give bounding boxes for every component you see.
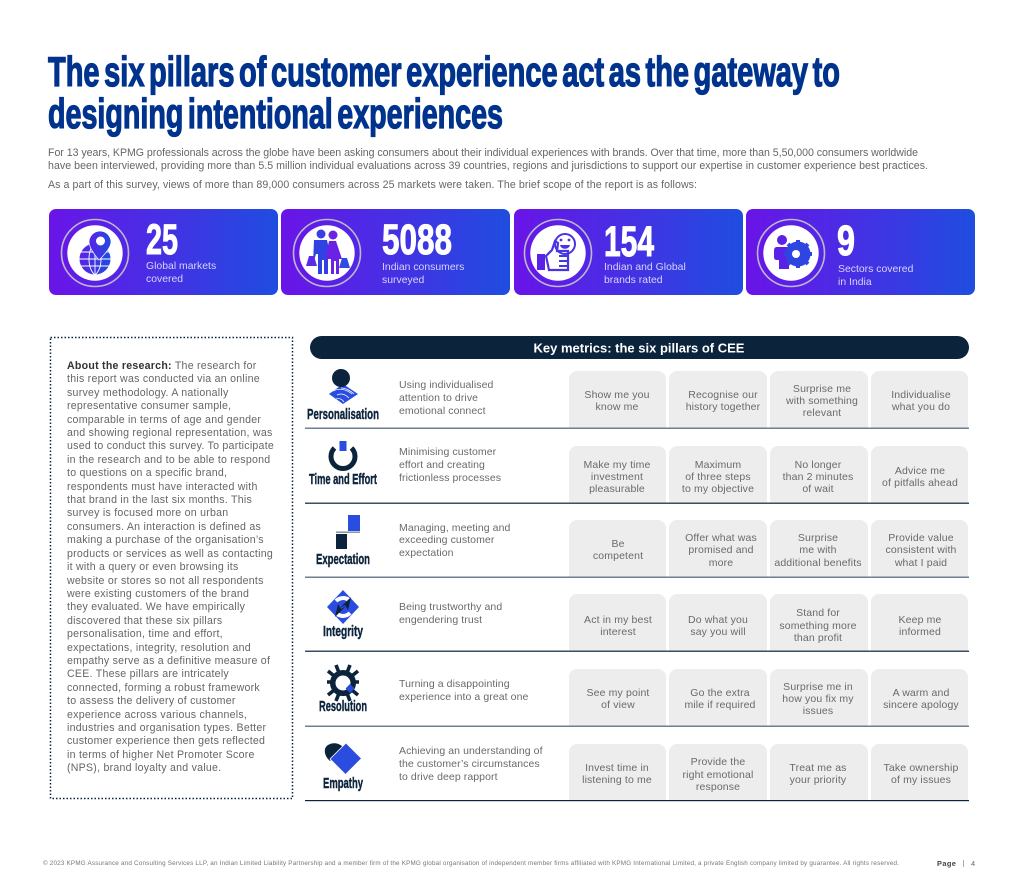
row: expectation: me with — [799, 544, 837, 556]
icon: resolution — [327, 665, 359, 701]
panel: about the research: (NPS), brand loyalty and value. — [67, 762, 221, 774]
row: personalisation: emotional connect — [399, 405, 486, 417]
row: integrity: interest — [600, 626, 636, 638]
row: time and effort: Minimising customer — [399, 446, 497, 458]
panel: about the research: comparable in terms of age and gender — [67, 414, 261, 426]
row: empathy: Achieving an understanding of — [399, 745, 543, 757]
row: personalisation: know me — [596, 401, 639, 413]
panel: about the research: expectations, integrity, resolution and — [67, 642, 251, 654]
row: integrity: Do what you — [688, 614, 748, 626]
title: designing intentional experiences — [48, 90, 503, 137]
panel: about the research: empathy serve as a definitive measure of — [67, 655, 270, 667]
panel: about the research: it with a query or even browsing its — [67, 561, 239, 573]
intro text: For 13 years, KPMG professionals across the globe have been asking consumers about their individual experiences with brands. Over that time, more than 5,50,000 consumers worldwide — [48, 147, 918, 159]
icon: thumbs up with smiley — [537, 234, 575, 270]
row: empathy: Provide the — [691, 756, 745, 768]
row: time and effort: effort and creating — [399, 459, 485, 471]
icon: time and effort — [331, 441, 355, 468]
panel: stat global markets — [49, 209, 278, 295]
panel: stat sectors — [746, 209, 975, 295]
panel: about the research — [50, 338, 292, 798]
row: integrity: Being trustworthy and — [399, 601, 502, 613]
panel: about the research: personalisation, time and effort, — [67, 628, 223, 640]
row: personalisation: Recognise our — [688, 389, 758, 401]
panel: about the research: were existing customers of the brand — [66, 588, 249, 600]
row: expectation: promised and — [688, 544, 754, 556]
panel: about the research: this report was conducted via an online — [67, 373, 260, 385]
row: resolution: sincere apology — [883, 699, 959, 711]
panel: about the research: customer experience then gets reflected — [67, 735, 265, 747]
row: integrity: Integrity — [323, 624, 363, 640]
row: expectation: competent — [593, 550, 643, 562]
row: time and effort — [305, 441, 969, 504]
row: expectation: Managing, meeting and — [399, 522, 511, 534]
panel: stat Indian consumers: Indian consumers — [382, 262, 464, 273]
row: empathy: Invest time in — [585, 762, 649, 774]
panel: stat brands rated: brands rated — [604, 275, 663, 286]
row: expectation: expectation — [399, 547, 454, 559]
row: expectation: Provide value — [888, 532, 954, 544]
panel: about the research: experience across various channels, — [67, 709, 247, 721]
row: expectation: more — [709, 557, 733, 569]
row: empathy: right emotional — [683, 769, 753, 781]
row: empathy: listening to me — [582, 774, 652, 786]
row: personalisation: Individualise — [891, 389, 951, 401]
panel: about the research: CEE. These pillars are intricately — [67, 668, 229, 680]
page number: Page — [937, 859, 956, 868]
row: time and effort: than 2 minutes — [783, 471, 853, 483]
row: empathy: Take ownership — [884, 762, 958, 774]
row: integrity: than profit — [794, 632, 842, 644]
icon: personalisation — [329, 369, 358, 404]
row: personalisation — [305, 369, 969, 429]
row: resolution: mile if required — [684, 699, 756, 711]
row: expectation: Offer what was — [685, 532, 757, 544]
panel: about the research: survey is focused more on urban — [67, 507, 228, 519]
row: time and effort: frictionless processes — [399, 472, 501, 484]
row: time and effort: Advice me — [895, 465, 945, 477]
panel: stat sectors: Sectors covered — [838, 264, 914, 275]
row: resolution: how you fix my — [782, 693, 854, 705]
row: integrity: Keep me — [898, 614, 942, 626]
row: time and effort: investment — [591, 471, 643, 483]
panel: about the research: About the research: The research for — [67, 360, 257, 372]
row: expectation: exceeding customer — [399, 534, 495, 546]
intro text: As a part of this survey, views of more than 89,000 consumers across 25 markets were taken. The brief scope of the report is as follows: — [48, 179, 697, 191]
row: personalisation: Surprise me — [793, 383, 851, 395]
row: empathy: Empathy — [323, 776, 363, 792]
row: time and effort: Maximum — [695, 459, 741, 471]
row: resolution: of view — [601, 699, 635, 711]
panel: stat sectors: 9 — [837, 217, 855, 265]
row: time and effort: No longer — [795, 459, 842, 471]
panel: stat sectors: in India — [838, 277, 872, 288]
row: time and effort: of wait — [802, 483, 834, 495]
row: resolution: Go the extra — [690, 687, 750, 699]
panel: about the research: to assess the delivery of customer — [67, 695, 236, 707]
row: resolution: Turning a disappointing — [399, 678, 510, 690]
title — [48, 48, 840, 137]
panel: stat brands rated: 154 — [604, 218, 654, 266]
panel: stat global markets: covered — [146, 274, 183, 285]
page number — [937, 859, 975, 868]
panel: about the research: website or stores so not all respondents — [66, 575, 264, 587]
row: empathy: the customer’s circumstances — [399, 758, 540, 770]
row: integrity: informed — [899, 626, 941, 638]
panel: about the research: respondents must have interacted with — [67, 481, 258, 493]
row: expectation: what I paid — [894, 557, 947, 569]
panel: about the research: they evaluated. We have empirically — [67, 601, 246, 613]
row: empathy: Treat me as — [789, 762, 847, 774]
panel: about the research: making a purchase of the organisation’s — [67, 534, 264, 546]
row: time and effort: Time and Effort — [309, 472, 377, 488]
intro text — [48, 147, 928, 191]
panel: about the research: industries and organisation types. Better — [67, 722, 267, 734]
panel: about the research: consumers. An interaction is defined as — [67, 521, 261, 533]
panel: about the research: to questions on a specific brand, — [67, 467, 227, 479]
panel: about the research: that brand in the last six months. This — [67, 494, 252, 506]
panel: about the research: discovered that these six pillars — [67, 615, 222, 627]
panel: about the research: survey methodology. A nationally — [67, 387, 229, 399]
row: resolution: Surprise me in — [783, 681, 853, 693]
row: personalisation: attention to drive — [399, 392, 478, 404]
panel: about the research: connected, forming a robust framework — [67, 682, 260, 694]
row: empathy — [305, 743, 969, 801]
panel: stat Indian consumers: surveyed — [382, 275, 425, 286]
row: empathy: your priority — [790, 774, 847, 786]
page number: 4 — [971, 859, 975, 868]
row: expectation — [305, 515, 969, 578]
panel: stat global markets: 25 — [146, 216, 178, 264]
intro text: have been interviewed, providing more than 5.5 million individual evaluations across 39 countries, regions and jurisdictions to support our expertise in customer experience best practices. — [48, 160, 928, 172]
icon: expectation — [336, 515, 360, 549]
row: personalisation: what you do — [891, 401, 950, 413]
panel: stat brands rated: Indian and Global — [604, 262, 686, 273]
icon: globe with pin — [79, 231, 111, 275]
row: resolution: issues — [803, 705, 833, 717]
row: time and effort: of three steps — [685, 471, 751, 483]
row: expectation: additional benefits — [774, 557, 862, 569]
footer copyright: © 2023 KPMG Assurance and Consulting Services LLP, an Indian Limited Liability Partnership and a member firm of the KPMG global organisation of independent member firms affiliated with KPMG International Limited, a private English company limited by guarantee. All rights reserved. — [43, 859, 899, 867]
icon: shoppers — [306, 230, 350, 274]
icon: person with gear — [774, 235, 812, 269]
row: resolution: A warm and — [893, 687, 949, 699]
icon: integrity — [327, 590, 359, 624]
row: integrity: Act in my best — [584, 614, 652, 626]
panel: stat brands rated — [514, 209, 743, 295]
row: expectation: Expectation — [316, 552, 370, 568]
row: integrity: engendering trust — [399, 614, 482, 626]
row: time and effort: pleasurable — [589, 483, 645, 495]
row: integrity: say you will — [690, 626, 746, 638]
icon: empathy — [325, 743, 362, 774]
panel: about the research: used to conduct this survey. To participate — [67, 440, 274, 452]
panel: about the research: in the research and to be able to respond — [67, 454, 270, 466]
row: empathy: response — [696, 781, 740, 793]
panel: stat Indian consumers — [281, 209, 510, 295]
panel: about the research: representative consumer sample, — [67, 400, 231, 412]
panel: about the research: and showing regional representation, was — [67, 427, 273, 439]
row: resolution — [305, 665, 969, 727]
row: resolution: Resolution — [319, 699, 367, 715]
row: personalisation: relevant — [803, 407, 841, 419]
row: empathy: to drive deep rapport — [399, 771, 498, 783]
row: personalisation: Using individualised — [399, 379, 493, 391]
row: personalisation: Personalisation — [307, 407, 379, 423]
row: empathy: of my issues — [891, 774, 951, 786]
row: resolution: See my point — [587, 687, 649, 699]
row: time and effort: Make my time — [583, 459, 651, 471]
panel: stat global markets: Global markets — [146, 261, 216, 272]
row: personalisation: history together — [686, 401, 761, 413]
row: personalisation: with something — [785, 395, 858, 407]
row: time and effort: of pitfalls ahead — [882, 477, 958, 489]
panel: about the research: in terms of higher Net Promoter Score — [67, 749, 255, 761]
heading bar: key metrics — [310, 336, 969, 359]
row: expectation: Be — [611, 538, 625, 550]
panel: stat Indian consumers: 5088 — [382, 216, 452, 264]
row: resolution: experience into a great one — [399, 691, 528, 703]
row: expectation: consistent with — [886, 544, 957, 556]
row: time and effort: to my objective — [682, 483, 754, 495]
panel: about the research: products or services as well as contacting — [67, 548, 273, 560]
row: integrity — [305, 590, 969, 652]
row: expectation: Surprise — [798, 532, 838, 544]
row: integrity: Stand for — [796, 607, 840, 619]
heading bar: key metrics: Key metrics: the six pillars of CEE — [534, 340, 745, 356]
row: personalisation: Show me you — [584, 389, 650, 401]
row: integrity: something more — [779, 620, 857, 632]
